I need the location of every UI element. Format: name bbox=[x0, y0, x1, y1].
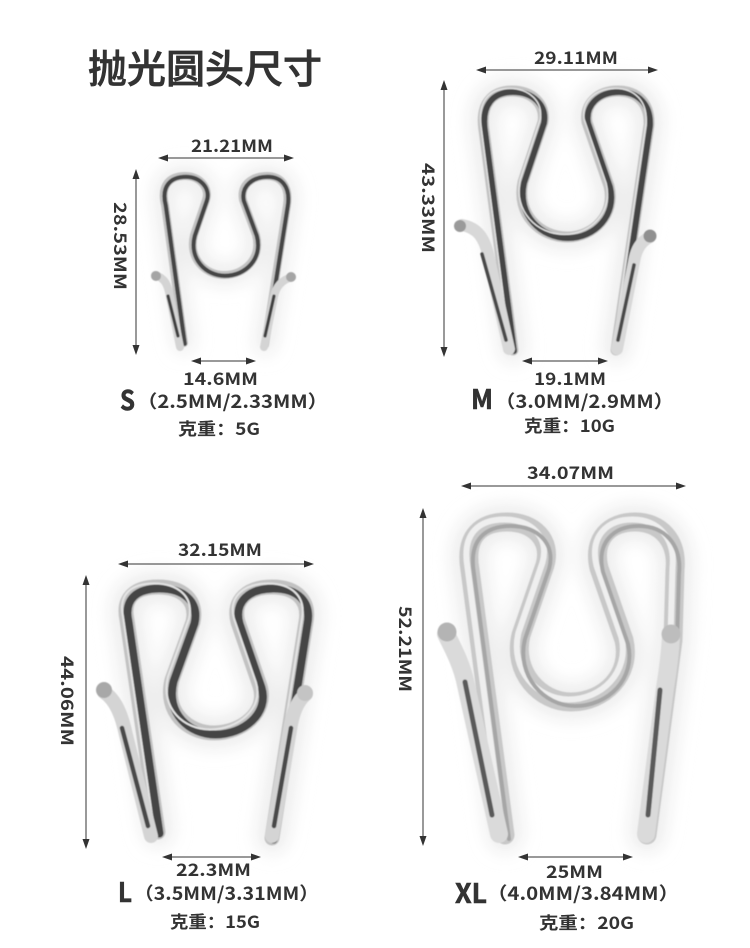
dimension: height M bbox=[417, 80, 448, 357]
clip: size XL bbox=[438, 520, 680, 839]
panel: size XL bbox=[394, 459, 686, 934]
weight L: 克重：15G bbox=[170, 908, 260, 933]
dimension: bottom width L: 22.3MM bbox=[176, 856, 251, 881]
weight M: 克重：10G bbox=[524, 412, 615, 437]
dimension: top width L: 32.15MM bbox=[178, 536, 262, 561]
size label S bbox=[120, 379, 328, 418]
dimension: top width S bbox=[158, 132, 294, 162]
title: 抛光圆头尺寸 bbox=[88, 39, 322, 95]
panel: size S bbox=[109, 132, 328, 440]
size label S: （2.5MM/2.33MM） bbox=[137, 388, 328, 414]
size label XL: XL bbox=[455, 872, 487, 911]
clip: size L bbox=[96, 584, 313, 840]
dimension: top width L bbox=[118, 536, 314, 568]
weight S: 克重：5G bbox=[178, 415, 260, 440]
dimension: bottom width S: 14.6MM bbox=[183, 365, 258, 390]
size label L bbox=[118, 871, 319, 910]
dimension: top width S: 21.21MM bbox=[191, 132, 273, 157]
dimension: top width M bbox=[476, 44, 658, 74]
dimension: height L bbox=[56, 575, 90, 849]
dimension: bottom width S bbox=[183, 358, 258, 390]
size label M: M bbox=[471, 378, 493, 417]
dimension: height L: 44.06MM bbox=[56, 656, 81, 746]
clip: size M bbox=[454, 88, 656, 351]
dimension: bottom width M: 19.1MM bbox=[534, 365, 606, 390]
size label XL bbox=[455, 872, 679, 911]
dimension: height XL: 52.21MM bbox=[394, 606, 419, 692]
size label S: S bbox=[120, 379, 135, 418]
dimension: top width XL: 34.07MM bbox=[527, 459, 614, 484]
dimension: top width XL bbox=[461, 459, 686, 490]
dimension: height S bbox=[109, 169, 140, 355]
dimension: height XL bbox=[394, 508, 426, 846]
panel: size L bbox=[56, 536, 319, 933]
dimension: top width M: 29.11MM bbox=[534, 44, 618, 69]
weight XL: 克重：20G bbox=[539, 909, 634, 934]
panel: size M bbox=[417, 44, 674, 437]
dimension: height S: 28.53MM bbox=[109, 202, 134, 290]
dimension: bottom width XL bbox=[518, 854, 633, 883]
dimension: bottom width M bbox=[522, 358, 608, 390]
dimension: height M: 43.33MM bbox=[417, 163, 442, 253]
size label M bbox=[471, 378, 674, 417]
clip: size S bbox=[151, 176, 296, 347]
size label L: （3.5MM/3.31MM） bbox=[134, 880, 319, 906]
dimension: bottom width XL: 25MM bbox=[546, 858, 603, 883]
size label XL: （4.0MM/3.84MM） bbox=[487, 880, 679, 906]
dimension: bottom width L bbox=[162, 854, 261, 881]
size label L: L bbox=[118, 871, 132, 910]
size label M: （3.0MM/2.9MM） bbox=[495, 388, 674, 414]
